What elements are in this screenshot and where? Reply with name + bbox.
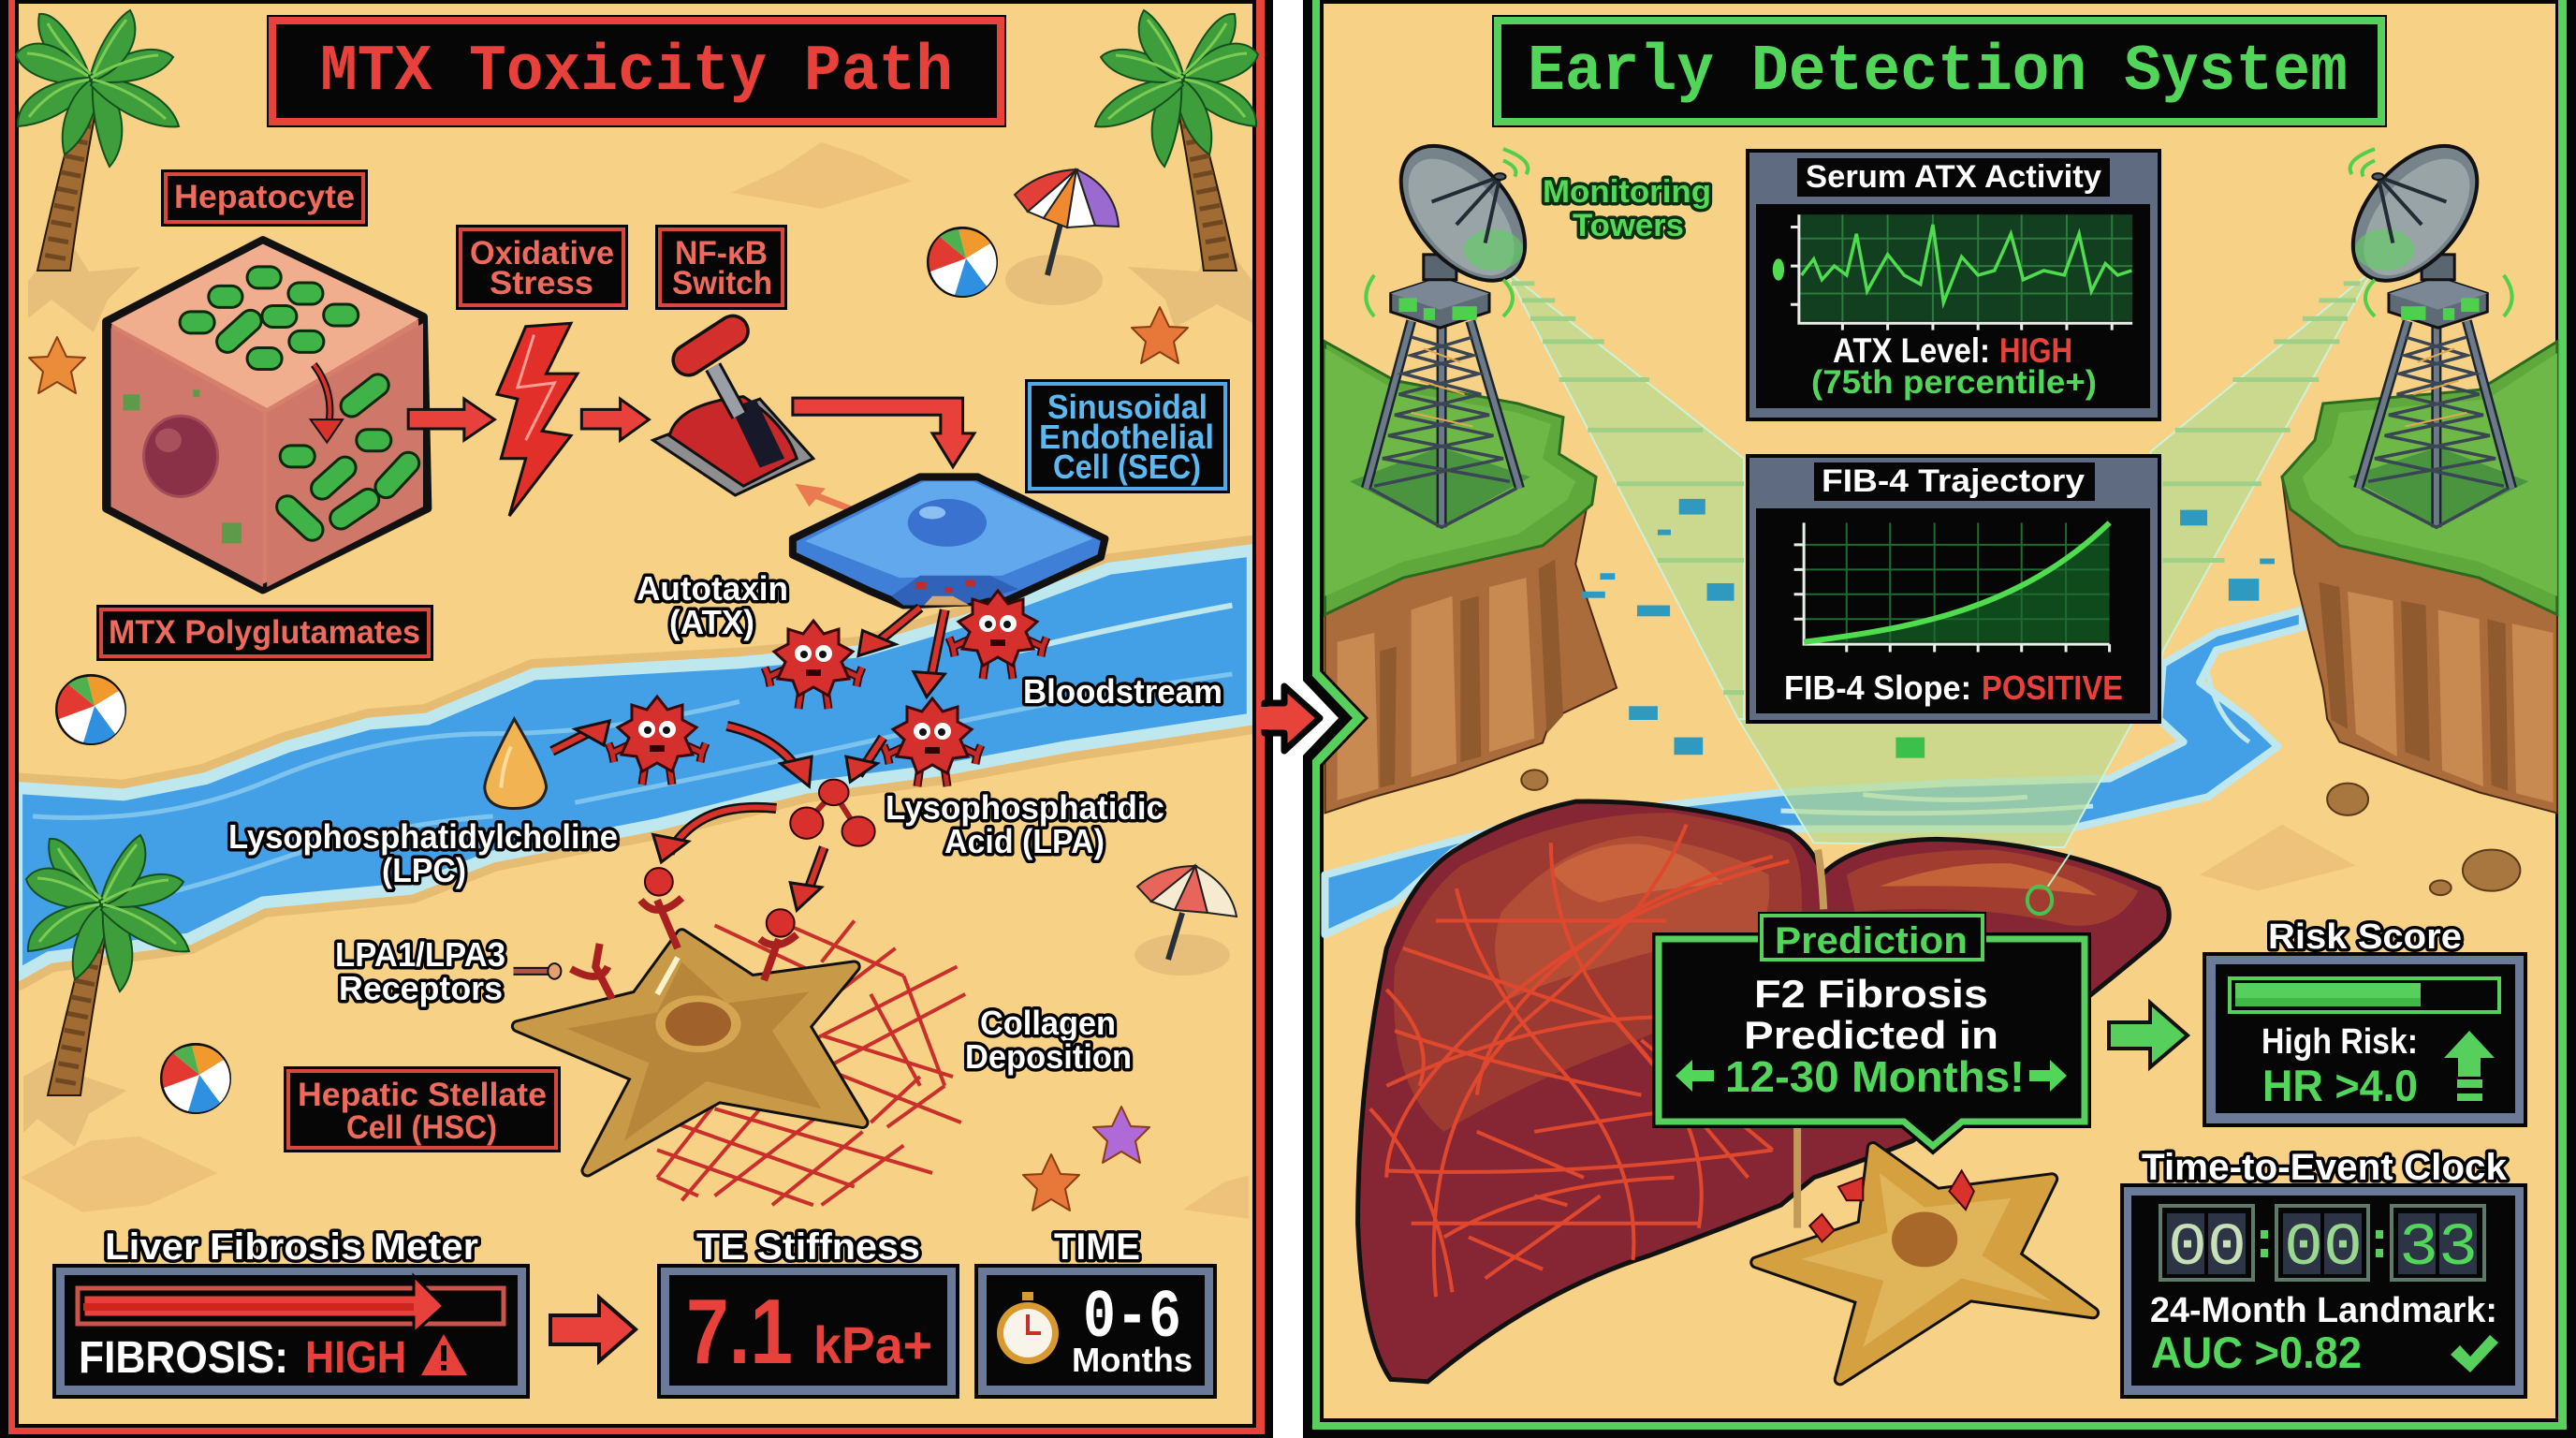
panel: time-to-event clock: 24-Month Landmark: bbox=[2150, 1291, 2497, 1330]
label: Autotaxin: Autotaxin bbox=[637, 569, 788, 608]
panel: TE stiffness value: kPa+ bbox=[813, 1315, 932, 1374]
panel: FIB-4 Trajectory: FIB-4 Trajectory bbox=[1822, 463, 2085, 499]
panel: MTX Toxicity Path bbox=[0, 0, 1273, 1438]
icon: collagen mesh bbox=[657, 921, 965, 1205]
icon: beach ball lower bbox=[162, 1045, 229, 1112]
arrow: prediction to risk score bbox=[2109, 1003, 2188, 1067]
label: Lysophosphatidic Acid bbox=[886, 788, 1164, 860]
icon: flip clock digits: 00 bbox=[2168, 1215, 2247, 1283]
panel: FIB-4 Trajectory: FIB-4 Slope: bbox=[1784, 668, 1971, 707]
icon: palm tree lower left bbox=[26, 835, 189, 1095]
label: Hepatic Stellate Cell: Hepatic Stellate bbox=[298, 1077, 547, 1113]
label: Autotaxin bbox=[637, 569, 788, 641]
icon: NF-kB lever switch bbox=[653, 331, 813, 495]
panel: TE stiffness value: 7.1 bbox=[686, 1280, 793, 1383]
icon: starfish orange lower bbox=[1023, 1154, 1079, 1211]
title: MTX Toxicity Path: MTX Toxicity Path bbox=[320, 36, 953, 110]
label: Lysophosphatidylcholine: Lysophosphatidylcholine bbox=[228, 817, 618, 856]
icon: sand mounds bbox=[21, 142, 1249, 1219]
panel: risk score: HR >4.0 bbox=[2262, 1061, 2418, 1110]
icon: hepatic stellate cell bbox=[518, 934, 862, 1170]
beam: right tower signal bbox=[2150, 271, 2372, 719]
label: Monitoring Towers: Towers bbox=[1573, 208, 1684, 243]
label: Lysophosphatidylcholine bbox=[228, 817, 618, 889]
label: NF-kB Switch: NF-κB bbox=[675, 235, 768, 271]
arrow: toxicity path to early detection bbox=[1256, 686, 1320, 751]
heading: Liver Fibrosis Meter: Liver Fibrosis Meter bbox=[105, 1226, 478, 1268]
icon: beach ball left bbox=[57, 676, 124, 743]
beam: left tower signal bbox=[1506, 271, 1744, 719]
icon: stopwatch bbox=[997, 1292, 1059, 1364]
icon: beach ball top bbox=[929, 228, 996, 296]
heading: Risk Score: Risk Score bbox=[2268, 917, 2462, 957]
label: Lysophosphatidic Acid: Lysophosphatidic bbox=[886, 788, 1164, 827]
panel frame: chevron notch bbox=[1273, 671, 1368, 765]
arrows: pathway in the bloodstream bbox=[552, 608, 944, 910]
label: Collagen Deposition: Collagen bbox=[980, 1004, 1116, 1042]
label: Prediction tab bbox=[1758, 912, 1986, 963]
panel: time window: 0-6 bbox=[1083, 1280, 1181, 1357]
icon: right cliff bbox=[2282, 342, 2557, 813]
chart: FIB-4 curve bbox=[1794, 522, 2110, 652]
icon: flip clock digits bbox=[2160, 1206, 2484, 1283]
label: Hepatic Stellate Cell bbox=[284, 1066, 561, 1152]
label: Oxidative Stress bbox=[456, 225, 628, 310]
callout: F2 fibrosis prediction: F2 Fibrosis bbox=[1754, 972, 1988, 1016]
icon: starfish orange left bbox=[29, 337, 85, 393]
label: LPA receptors bbox=[335, 935, 505, 1007]
label: Monitoring Towers: Monitoring bbox=[1543, 174, 1711, 210]
panel: fibrosis meter bbox=[52, 1264, 530, 1399]
label: Sinusoidal Endothelial Cell: Sinusoidal bbox=[1047, 388, 1208, 426]
icon: check mark bbox=[2451, 1335, 2498, 1372]
label: Lysophosphatidic Acid: Acid (LPA) bbox=[944, 822, 1105, 860]
label: LPA receptors: LPA1/LPA3 bbox=[335, 935, 505, 974]
panel: Serum ATX Activity: HIGH bbox=[1999, 331, 2072, 370]
beam: converging on liver bbox=[1738, 719, 2134, 847]
label: Sinusoidal Endothelial Cell: Endothelial bbox=[1039, 418, 1214, 456]
icon: sand rocks bbox=[1521, 770, 2520, 895]
title: Early Detection System: Early Detection System bbox=[1528, 36, 2348, 110]
icon: palm tree top left bbox=[16, 10, 179, 271]
icon: LPA receptors bbox=[513, 868, 797, 999]
label: Hepatic Stellate Cell: Cell (HSC) bbox=[346, 1109, 497, 1146]
panel: Serum ATX Activity: ATX Level: bbox=[1833, 331, 1990, 370]
arrow: switch to SEC bbox=[793, 398, 974, 467]
panel: TE stiffness value bbox=[657, 1264, 959, 1399]
label: LPA receptors: Receptors bbox=[339, 969, 503, 1007]
icon: data packet and marker bbox=[1674, 738, 1925, 758]
label: Monitoring Towers bbox=[1543, 174, 1711, 243]
icon: autotaxin enzymes bbox=[608, 591, 1046, 786]
icon: risk up arrow bbox=[2444, 1031, 2495, 1077]
label: Hepatocyte bbox=[161, 169, 368, 227]
panel: time window bbox=[974, 1264, 1217, 1399]
callout: F2 fibrosis prediction: Predicted in bbox=[1744, 1013, 1998, 1057]
icon: starfish purple bbox=[1093, 1107, 1149, 1163]
heading: Time-to-Event Clock: Time-to-Event Clock bbox=[2142, 1147, 2508, 1188]
icon: flip clock digits: 33 bbox=[2399, 1215, 2478, 1283]
panel: risk score bbox=[2203, 952, 2527, 1127]
arrow: stress to switch bbox=[581, 399, 649, 440]
arrow: meter to stiffness bbox=[550, 1298, 636, 1361]
icon: palm shadows bbox=[23, 234, 1252, 1147]
icon: beach umbrella lower bbox=[1134, 866, 1237, 976]
panel: FIB-4 Trajectory bbox=[1746, 454, 2161, 724]
label: MTX Polyglutamates bbox=[96, 605, 433, 661]
panel: FIB-4 Trajectory: POSITIVE bbox=[1982, 668, 2123, 707]
label: Sinusoidal Endothelial Cell bbox=[1025, 379, 1230, 493]
icon: LPA molecule bbox=[790, 780, 875, 846]
label: Bloodstream: Bloodstream bbox=[1023, 672, 1222, 711]
label: NF-kB Switch: Switch bbox=[672, 265, 772, 301]
panel: Serum ATX Activity: Serum ATX Activity bbox=[1806, 159, 2101, 195]
label: Autotaxin: (ATX) bbox=[669, 603, 754, 641]
arrow: hepatocyte to stress bbox=[408, 399, 494, 440]
label: Lysophosphatidylcholine: (LPC) bbox=[382, 851, 466, 889]
label: MTX Polyglutamates: MTX Polyglutamates bbox=[109, 614, 420, 651]
icon: hepatocyte cube bbox=[107, 241, 427, 589]
icon: LPC droplet bbox=[485, 719, 547, 809]
panel: risk score: High Risk: bbox=[2261, 1022, 2418, 1062]
title: Early Detection System bbox=[1492, 15, 2387, 127]
icon: palm tree top right bbox=[1095, 10, 1258, 271]
icon: right monitoring tower bbox=[2329, 123, 2528, 527]
icon: endothelial cell bbox=[793, 477, 1105, 606]
label: Oxidative Stress: Oxidative bbox=[470, 235, 614, 271]
icon: beach umbrella top bbox=[1005, 169, 1119, 305]
panel: time window: Months bbox=[1072, 1341, 1193, 1379]
callout: F2 fibrosis prediction: 12-30 Months! bbox=[1725, 1052, 2025, 1101]
panel: fibrosis meter: FIBROSIS: bbox=[79, 1333, 288, 1383]
label: Hepatocyte: Hepatocyte bbox=[174, 179, 355, 215]
river: bloodstream bbox=[17, 550, 1252, 976]
chart: ATX line bbox=[1773, 214, 2132, 330]
heading: TE Stiffness: TE Stiffness bbox=[696, 1226, 920, 1268]
label: Sinusoidal Endothelial Cell: Cell (SEC) bbox=[1053, 448, 1201, 486]
icon: starfish orange right bbox=[1132, 307, 1188, 363]
icon: left monitoring tower bbox=[1350, 123, 1549, 527]
icon: left cliff bbox=[1325, 342, 1617, 813]
callout: F2 fibrosis prediction bbox=[1654, 912, 2089, 1152]
label: Oxidative Stress: Stress bbox=[490, 265, 593, 301]
heading: TIME: TIME bbox=[1054, 1226, 1140, 1268]
panel: fibrosis meter: HIGH bbox=[305, 1333, 406, 1383]
panel: Serum ATX Activity bbox=[1746, 149, 2161, 421]
panel: Serum ATX Activity: (75th percentile+) bbox=[1811, 364, 2097, 401]
icon: activated stellate cell on liver bbox=[1756, 1148, 2093, 1379]
label: Collagen Deposition bbox=[965, 1004, 1132, 1076]
panel: time-to-event clock bbox=[2120, 1183, 2527, 1399]
title: MTX Toxicity Path bbox=[267, 15, 1006, 127]
label: Prediction tab: Prediction bbox=[1775, 920, 1968, 961]
panel: Early Detection System bbox=[1303, 0, 2576, 1438]
icon: flip clock digits: 00 bbox=[2284, 1215, 2363, 1283]
panel: time-to-event clock: AUC >0.82 bbox=[2151, 1328, 2362, 1377]
label: NF-kB Switch bbox=[655, 225, 787, 310]
label: Collagen Deposition: Deposition bbox=[965, 1037, 1132, 1076]
icon: lightning bolt bbox=[497, 323, 578, 516]
icon: data packets bbox=[1582, 499, 2275, 720]
river: right panel bbox=[1325, 609, 2303, 934]
icon: fibrotic liver bbox=[1358, 801, 2169, 1382]
arrow: faint feedback bbox=[796, 484, 850, 509]
